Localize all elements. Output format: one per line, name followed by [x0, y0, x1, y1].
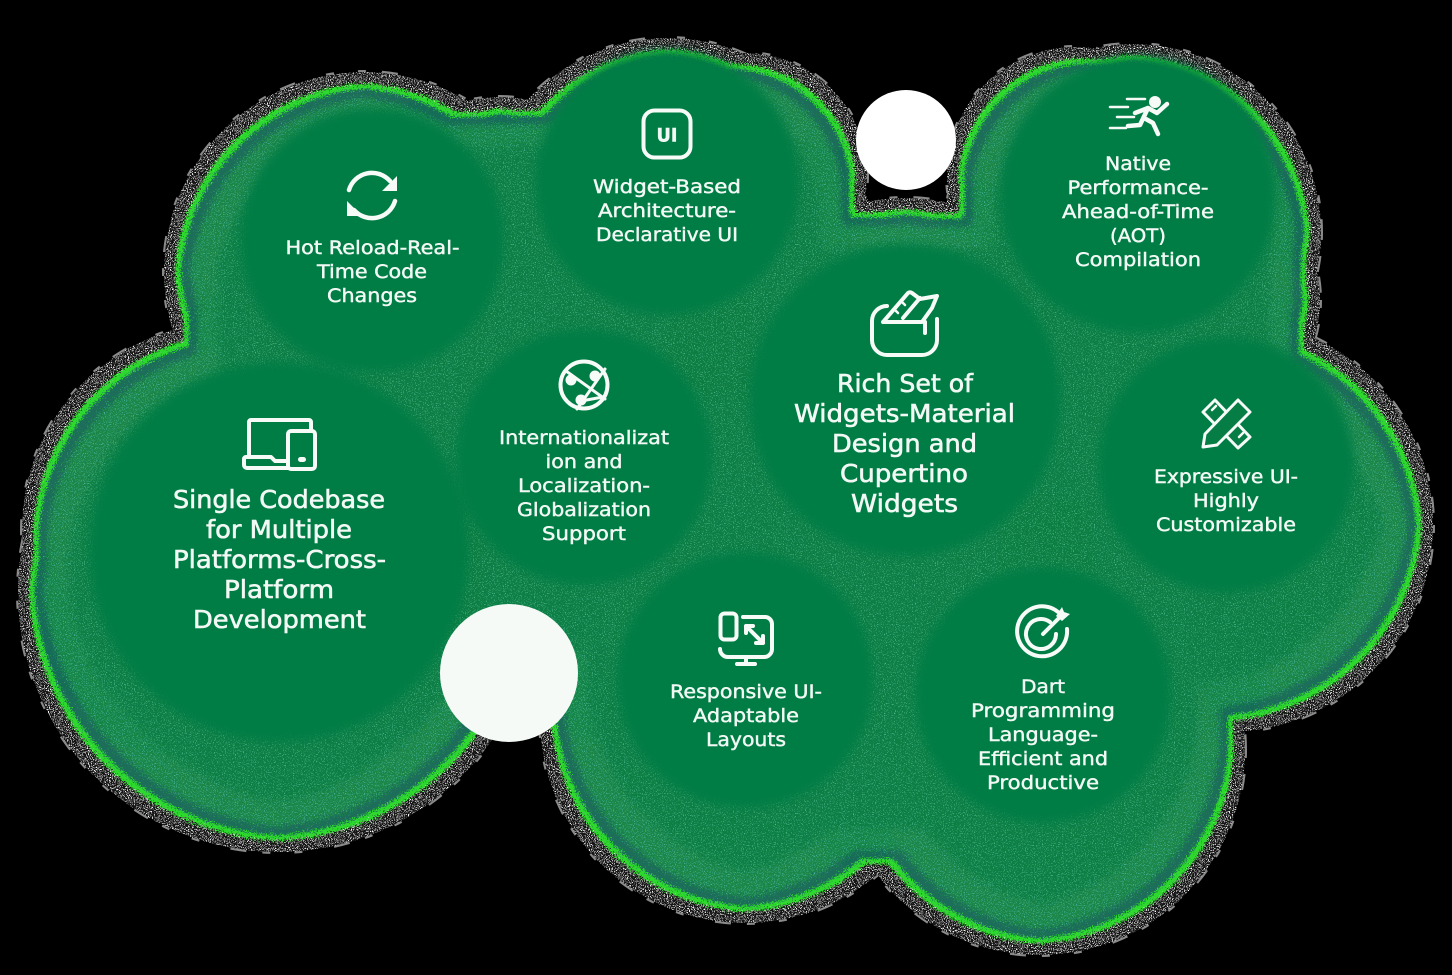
white dot: lower left notch	[440, 604, 578, 742]
label: widget-based: Widget-Based	[593, 176, 741, 198]
panel: internationalization	[499, 362, 669, 545]
icon: target with arrow	[1017, 606, 1070, 656]
panel: dart programming	[971, 606, 1115, 794]
label: single codebase: Development	[193, 605, 366, 634]
label: rich set: Widgets-Material	[794, 399, 1015, 428]
label: internationalization	[499, 427, 669, 545]
panel: single codebase	[173, 420, 386, 634]
label: dart programming: Efficient and	[978, 748, 1108, 770]
solid inner circles	[89, 51, 1354, 823]
label: single codebase: Platforms-Cross-	[173, 545, 386, 574]
panel: expressive UI	[1154, 400, 1298, 536]
label: native performance: Native	[1105, 153, 1171, 175]
label: rich set: Cupertino	[840, 459, 968, 488]
label: rich set	[794, 369, 1015, 518]
label: hot reload	[286, 237, 460, 307]
label: native performance: (AOT)	[1110, 225, 1166, 247]
label: widget-based: Architecture-	[598, 200, 736, 222]
label: rich set: Design and	[832, 429, 977, 458]
icon: refresh arrows	[347, 173, 397, 218]
label: dart programming	[971, 676, 1115, 794]
label: native performance: Compilation	[1075, 249, 1201, 271]
label: dart programming: Productive	[987, 772, 1099, 794]
label: single codebase: Single Codebase	[173, 485, 385, 514]
label: expressive UI: Highly	[1193, 490, 1259, 512]
label: expressive UI: Expressive UI-	[1154, 466, 1298, 488]
label: internationalization: Localization-	[518, 475, 650, 497]
label: hot reload: Hot Reload-Real-	[286, 237, 460, 259]
label: hot reload: Changes	[327, 285, 417, 307]
label: dart programming: Language-	[988, 724, 1098, 746]
label: responsive UI: Responsive UI-	[670, 681, 822, 703]
label: native performance: Performance-	[1068, 177, 1208, 199]
icon: laptop and tablet	[244, 420, 315, 469]
label: single codebase: for Multiple	[206, 515, 352, 544]
panel: widget-based architecture	[593, 110, 741, 246]
label: single codebase	[173, 485, 386, 634]
label: expressive UI: Customizable	[1156, 514, 1296, 536]
label: widget-based: Declarative UI	[596, 224, 738, 246]
label: internationalization: ion and	[546, 451, 622, 473]
label: single codebase: Platform	[224, 575, 334, 604]
panel: hot reload	[286, 173, 460, 307]
icon: crossed ruler and pencil	[1203, 400, 1250, 448]
icon: network globe	[560, 362, 608, 409]
label: rich set: Rich Set of	[837, 369, 974, 398]
icon: UI square	[644, 110, 690, 158]
white dot: top right notch	[856, 90, 956, 190]
panel: native performance	[1062, 96, 1214, 271]
label: internationalization: Internationalizat	[499, 427, 669, 449]
panel: responsive UI	[670, 614, 822, 751]
icon: toolbox with ruler and pencil	[872, 292, 937, 355]
icon: runner	[1110, 96, 1167, 134]
label: dart programming: Dart	[1021, 676, 1065, 698]
label: responsive UI: Adaptable	[693, 705, 799, 727]
panel: rich set of widgets	[794, 292, 1015, 518]
label: internationalization: Support	[542, 523, 626, 545]
label: internationalization: Globalization	[517, 499, 651, 521]
label: expressive UI	[1154, 466, 1298, 536]
label: hot reload: Time Code	[316, 261, 427, 283]
label: responsive UI: Layouts	[706, 729, 786, 751]
label: responsive UI	[670, 681, 822, 751]
icon: UI square: UI	[656, 124, 678, 146]
label: native performance	[1062, 153, 1214, 271]
label: dart programming: Programming	[971, 700, 1115, 722]
label: native performance: Ahead-of-Time	[1062, 201, 1214, 223]
icon: responsive screens	[720, 614, 772, 664]
label: widget-based	[593, 176, 741, 246]
label: rich set: Widgets	[851, 489, 958, 518]
